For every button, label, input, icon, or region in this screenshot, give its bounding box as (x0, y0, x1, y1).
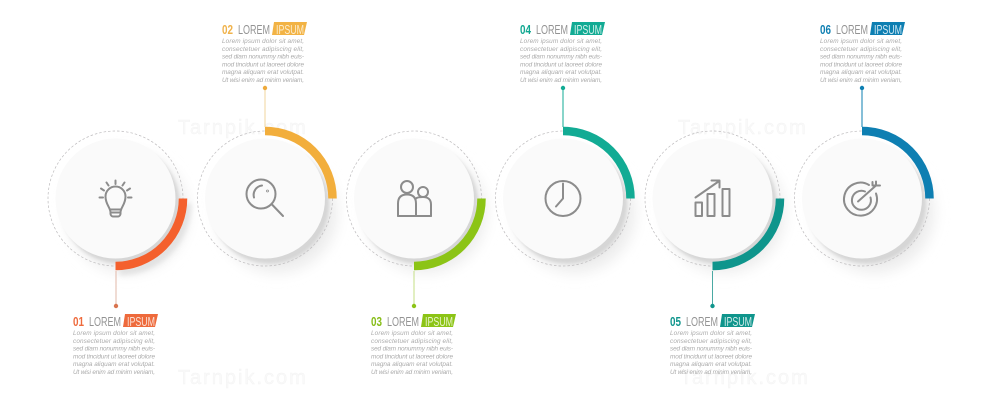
body text: sed diam nonummy nibh euis- (520, 54, 602, 61)
body text: sed diam nonummy nibh euis- (820, 54, 902, 61)
heading: 03 LOREM IPSUM: IPSUM (425, 314, 453, 329)
watermark: top left: Tarnpik.com (178, 117, 308, 139)
panel: step 04 circle (496, 131, 635, 272)
connector: step 04 (561, 86, 565, 127)
heading: 04 LOREM IPSUM: IPSUM (574, 22, 602, 37)
arc: teal (563, 131, 630, 198)
body text: Lorem ipsum dolor sit amet, (520, 38, 602, 45)
watermark: bottom left: Tarnpik.com (178, 367, 308, 389)
text block: step 04 (520, 22, 605, 84)
body text: consectetuer adipiscing elit, (371, 338, 453, 345)
icon: clock (546, 181, 580, 216)
heading: 05 LOREM IPSUM (670, 314, 755, 329)
text block: step 06 (820, 22, 905, 84)
body text: Ut wisi enim ad minim veniam, (670, 369, 752, 376)
body text: Ut wisi enim ad minim veniam, (820, 77, 902, 84)
body text: consectetuer adipiscing elit, (670, 338, 752, 345)
body text: mod tincidunt ut laoreet dolore (670, 353, 752, 360)
body text: mod tincidunt ut laoreet dolore (371, 353, 453, 360)
body text: consectetuer adipiscing elit, (520, 46, 602, 53)
arc: orange (116, 198, 183, 266)
connector: step 01 (114, 271, 118, 308)
connector: step 03 (412, 271, 416, 308)
heading: 02 LOREM IPSUM: LOREM (238, 22, 270, 37)
body text: Ut wisi enim ad minim veniam, (73, 369, 155, 376)
heading: 04 LOREM IPSUM (520, 22, 605, 37)
watermark: bottom right: Tarnpik.com (680, 367, 810, 389)
text block: step 05 (670, 314, 755, 376)
heading: 01 LOREM IPSUM: LOREM (89, 314, 121, 329)
body text: magna aliquam erat volutpat. (820, 69, 902, 76)
heading: 05 LOREM IPSUM: IPSUM (724, 314, 752, 329)
body text (820, 38, 902, 84)
icon: light bulb (100, 180, 132, 217)
arc: amber (265, 131, 332, 198)
body text (73, 330, 155, 376)
icon: target (844, 182, 880, 216)
body text: Lorem ipsum dolor sit amet, (820, 38, 902, 45)
panel: step 01 circle (48, 131, 188, 272)
text block: step 01 (73, 314, 158, 376)
arc: blue (862, 131, 930, 198)
body text: mod tincidunt ut laoreet dolore (520, 61, 602, 68)
body text (520, 38, 602, 84)
icon: people (398, 181, 431, 216)
heading: 02 LOREM IPSUM: IPSUM (276, 22, 304, 37)
panel: step 05 circle (645, 131, 784, 272)
heading: 03 LOREM IPSUM (371, 314, 456, 329)
heading: 02 LOREM IPSUM (222, 22, 307, 37)
heading: 06 LOREM IPSUM (820, 22, 905, 37)
body text: mod tincidunt ut laoreet dolore (73, 353, 155, 360)
connector: step 02 (263, 86, 267, 127)
body text: magna aliquam erat volutpat. (371, 361, 453, 368)
heading: 04 LOREM IPSUM: 04 (520, 22, 532, 37)
body text: consectetuer adipiscing elit, (222, 46, 304, 53)
heading: 04 LOREM IPSUM: LOREM (536, 22, 568, 37)
body text: sed diam nonummy nibh euis- (670, 346, 752, 353)
connector: step 06 (860, 86, 864, 127)
body text: consectetuer adipiscing elit, (73, 338, 155, 345)
body text (670, 330, 752, 376)
body text (222, 38, 304, 84)
body text: consectetuer adipiscing elit, (820, 46, 902, 53)
body text: Ut wisi enim ad minim veniam, (520, 77, 602, 84)
text block: step 03 (371, 314, 456, 376)
heading: 06 LOREM IPSUM: IPSUM (874, 22, 902, 37)
body text: sed diam nonummy nibh euis- (222, 54, 304, 61)
connector: step 05 (710, 271, 715, 308)
arc: green (414, 198, 482, 266)
body text: Lorem ipsum dolor sit amet, (670, 330, 752, 337)
panel: step 06 circle (794, 131, 934, 272)
heading: 06 LOREM IPSUM: 06 (820, 22, 831, 37)
body text: Ut wisi enim ad minim veniam, (222, 77, 304, 84)
body text: Lorem ipsum dolor sit amet, (222, 38, 304, 45)
heading: 06 LOREM IPSUM: LOREM (836, 22, 868, 37)
heading: 03 LOREM IPSUM: 03 (371, 314, 382, 329)
arc: dark teal (712, 198, 780, 266)
heading: 01 LOREM IPSUM: 01 (73, 314, 84, 329)
icon: magnifier (246, 180, 283, 216)
body text: mod tincidunt ut laoreet dolore (820, 61, 902, 68)
heading: 05 LOREM IPSUM: LOREM (686, 314, 718, 329)
body text: Lorem ipsum dolor sit amet, (73, 330, 155, 337)
body text: magna aliquam erat volutpat. (670, 361, 752, 368)
body text (371, 330, 453, 376)
body text: Lorem ipsum dolor sit amet, (371, 330, 453, 337)
body text: magna aliquam erat volutpat. (73, 361, 155, 368)
heading: 02 LOREM IPSUM: 02 (222, 22, 233, 37)
body text: mod tincidunt ut laoreet dolore (222, 61, 304, 68)
heading: 03 LOREM IPSUM: LOREM (387, 314, 419, 329)
heading: 05 LOREM IPSUM: 05 (670, 314, 681, 329)
panel: step 02 circle (198, 131, 337, 272)
panel: step 03 circle (346, 131, 486, 272)
text block: step 02 (222, 22, 307, 84)
body text: sed diam nonummy nibh euis- (73, 346, 155, 353)
body text: magna aliquam erat volutpat. (520, 69, 602, 76)
watermark: top right: Tarnpik.com (678, 117, 808, 139)
icon: growth chart (696, 180, 730, 216)
body text: sed diam nonummy nibh euis- (371, 346, 453, 353)
heading: 01 LOREM IPSUM (73, 314, 158, 329)
heading: 01 LOREM IPSUM: IPSUM (127, 314, 155, 329)
body text: magna aliquam erat volutpat. (222, 69, 304, 76)
body text: Ut wisi enim ad minim veniam, (371, 369, 453, 376)
